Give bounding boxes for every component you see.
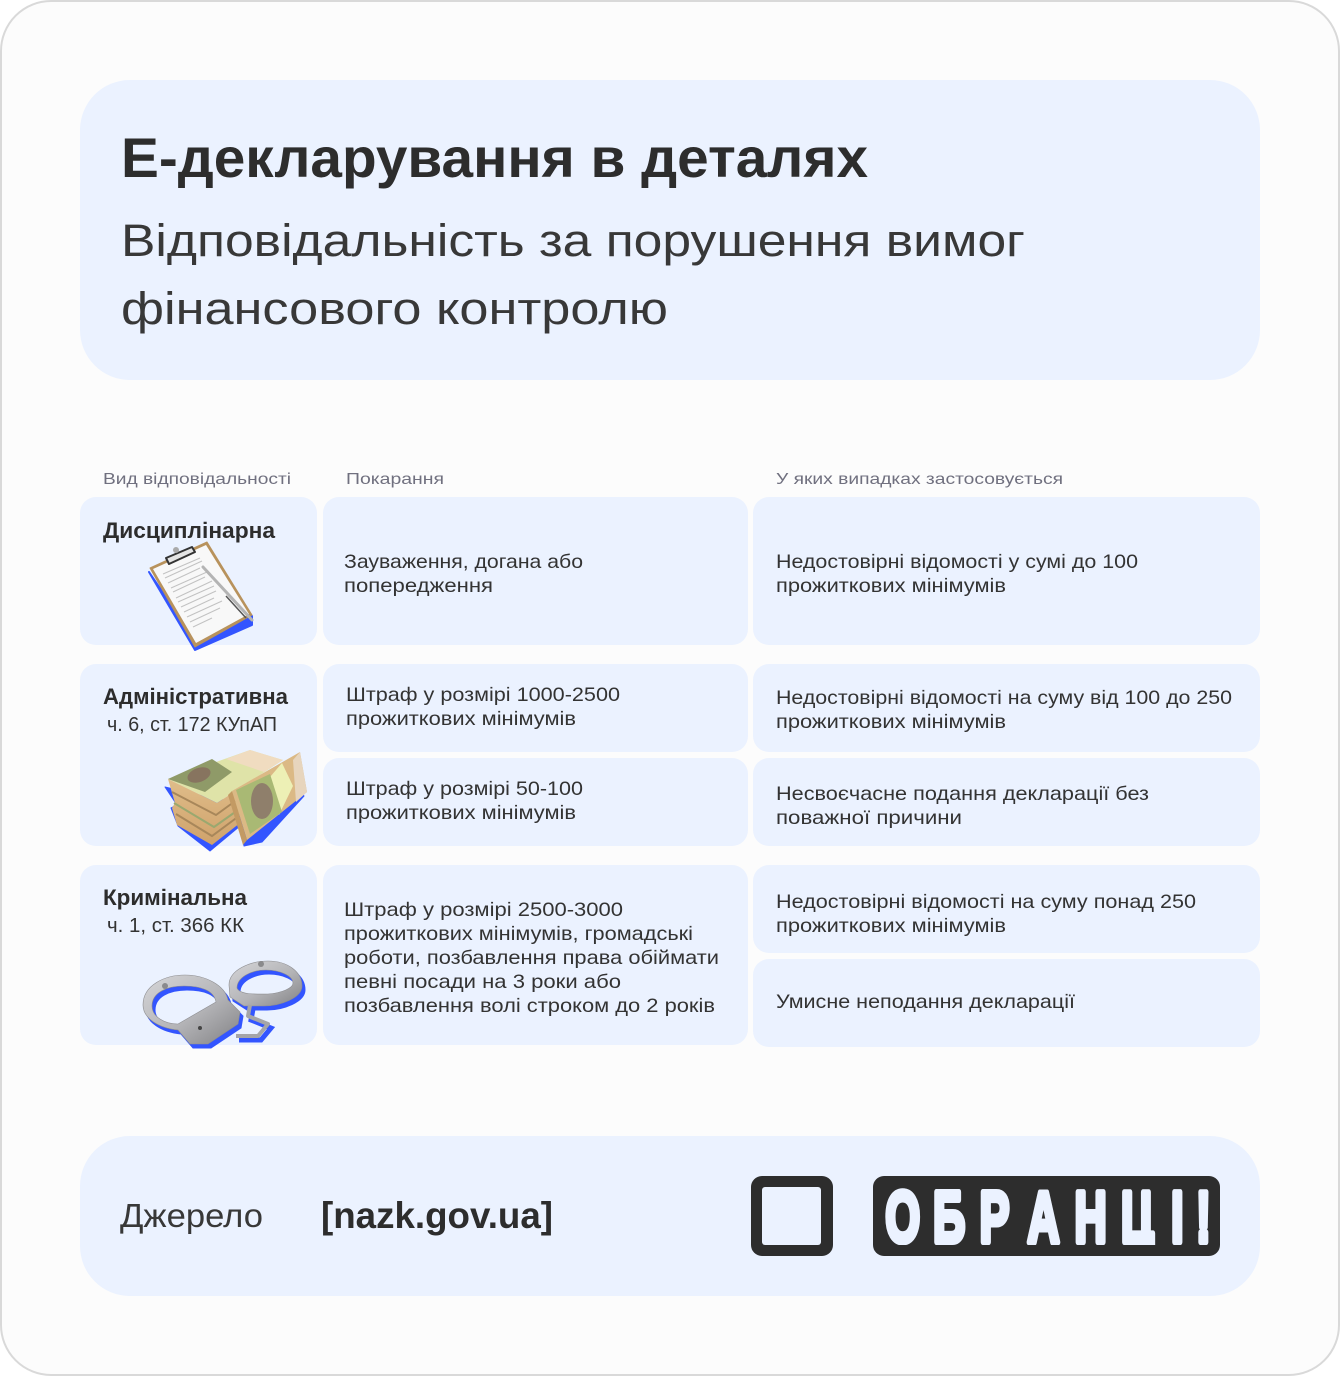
source label: Джерело bbox=[120, 1197, 263, 1234]
heading: administrative: Адміністративна bbox=[103, 684, 289, 709]
panel: criminal penalty: певні посади на 3 роки або bbox=[344, 971, 621, 993]
panel: administrative cases, late filing bbox=[753, 758, 1260, 846]
panel: criminal penalty: Штраф у розмірі 2500-3000 bbox=[344, 899, 623, 921]
panel: disciplinary penalty: попередження bbox=[344, 575, 493, 597]
icon: clipboard bbox=[149, 542, 252, 650]
panel: administrative cases, inaccurate data bbox=[753, 664, 1260, 752]
panel: criminal cases, inaccurate data bbox=[753, 865, 1260, 953]
panel: administrative penalty, low fine bbox=[323, 758, 748, 846]
title: Е-декларування в деталях bbox=[121, 126, 868, 189]
table column headers bbox=[103, 471, 1063, 488]
subtitle: фінансового контролю bbox=[121, 283, 668, 334]
panel: disciplinary liability bbox=[80, 497, 317, 650]
panel: criminal liability bbox=[80, 865, 317, 1048]
table column headers: Вид відповідальності bbox=[103, 471, 291, 488]
panel: criminal penalty: роботи, позбавлення права обіймати bbox=[344, 947, 719, 969]
panel: administrative cases, late filing: поважної причини bbox=[776, 807, 962, 829]
panel: disciplinary cases: Недостовірні відомості у сумі до 100 bbox=[776, 551, 1138, 573]
heading: criminal: Кримінальна bbox=[103, 885, 248, 910]
panel: disciplinary penalty: Зауваження, догана або bbox=[344, 551, 583, 573]
panel: disciplinary cases bbox=[753, 497, 1260, 645]
source link: [nazk.gov.ua] bbox=[321, 1195, 553, 1236]
subtitle: Відповідальність за порушення вимог bbox=[121, 215, 1025, 266]
panel: administrative cases, late filing: Несвоєчасне подання декларації без bbox=[776, 783, 1149, 805]
panel: administrative penalty, low fine: прожиткових мінімумів bbox=[346, 802, 576, 824]
panel: administrative penalty, high fine bbox=[323, 664, 748, 752]
logo: Обранці: ОБРАНЦІ! bbox=[885, 1177, 1211, 1258]
panel: criminal cases, inaccurate data: Недостовірні відомості на суму понад 250 bbox=[776, 891, 1196, 913]
panel: criminal penalty: позбавлення волі строком до 2 років bbox=[344, 995, 715, 1017]
panel: criminal penalty: прожиткових мінімумів, громадські bbox=[344, 923, 693, 945]
icon: handcuffs bbox=[143, 961, 305, 1048]
panel: criminal cases, non-filing bbox=[753, 959, 1260, 1047]
heading: disciplinary: Дисциплінарна bbox=[103, 518, 276, 543]
panel: footer bbox=[80, 1136, 1260, 1296]
panel: administrative penalty, high fine: Штраф у розмірі 1000-2500 bbox=[346, 684, 620, 706]
panel: administrative liability bbox=[80, 664, 317, 851]
article reference: ч. 6, ст. 172 КУпАП bbox=[107, 714, 277, 736]
table column headers: У яких випадках застосовується bbox=[776, 471, 1063, 488]
icon: logo square bbox=[751, 1176, 833, 1256]
panel: disciplinary cases: прожиткових мінімумів bbox=[776, 575, 1006, 597]
panel: header bbox=[80, 80, 1260, 380]
panel: criminal penalty bbox=[323, 865, 748, 1045]
icon: money stacks bbox=[165, 750, 307, 851]
panel: administrative penalty, low fine: Штраф у розмірі 50-100 bbox=[346, 778, 583, 800]
panel: criminal cases, non-filing: Умисне неподання декларації bbox=[776, 991, 1076, 1013]
panel: disciplinary penalty bbox=[323, 497, 748, 645]
panel: administrative cases, inaccurate data: прожиткових мінімумів bbox=[776, 711, 1006, 733]
subtitle bbox=[121, 215, 1025, 334]
table column headers: Покарання bbox=[346, 471, 444, 488]
panel: criminal cases, inaccurate data: прожиткових мінімумів bbox=[776, 915, 1006, 937]
panel: administrative penalty, high fine: прожиткових мінімумів bbox=[346, 708, 576, 730]
panel: administrative cases, inaccurate data: Недостовірні відомості на суму від 100 до 250 bbox=[776, 687, 1232, 709]
article reference: ч. 1, ст. 366 КК bbox=[107, 915, 244, 937]
